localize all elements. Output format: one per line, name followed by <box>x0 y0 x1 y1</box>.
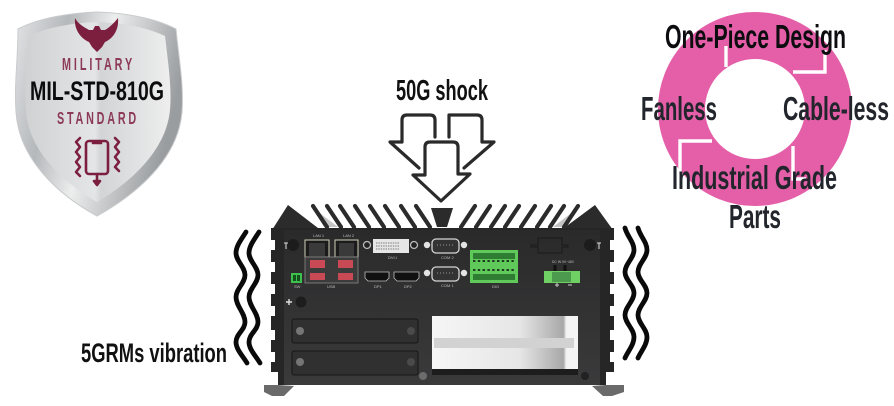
power connector: DC IN 9V~48V <box>552 259 574 264</box>
icon: shock arrows <box>390 115 494 201</box>
shield rim <box>15 12 182 216</box>
LAN ports: LAN 2 <box>343 233 355 238</box>
small green connector <box>291 273 302 289</box>
DVI port: DVI-I <box>388 255 397 260</box>
feature ring diagram <box>641 18 889 235</box>
port tick marks <box>284 243 601 249</box>
power connector <box>544 259 580 287</box>
small green connector: SW <box>294 284 301 289</box>
heatsink fins <box>313 206 578 227</box>
mounting holes <box>287 239 596 251</box>
military standard shield badge <box>15 12 182 216</box>
DVI port <box>364 239 418 260</box>
military label: MILITARY <box>62 55 132 75</box>
LAN ports: LAN 1 <box>313 233 325 238</box>
label: Fanless: Fanless <box>641 90 717 127</box>
ground screw <box>286 296 306 308</box>
green terminal block: DIO <box>492 284 499 289</box>
COM ports <box>424 239 467 288</box>
open expansion bay <box>419 316 589 380</box>
icon: left vibration waves <box>236 232 260 363</box>
standard name: MIL-STD-810G <box>30 76 164 106</box>
expansion slot covers <box>292 319 418 375</box>
USB ports <box>305 257 358 289</box>
fin highlights <box>313 208 578 227</box>
centre heatsink block <box>431 208 453 227</box>
right corner <box>564 205 613 230</box>
blanked port outline <box>531 238 568 253</box>
shield face <box>25 22 171 202</box>
green terminal block <box>470 250 518 289</box>
label: 50G shock: 50G shock <box>396 75 489 107</box>
industrial computer front view <box>264 205 624 396</box>
standard label: STANDARD <box>57 109 136 129</box>
icon: right vibration waves <box>625 228 647 358</box>
mounting flanges <box>264 385 624 396</box>
left corner <box>272 205 318 230</box>
COM ports: COM 1 <box>441 283 454 288</box>
ring dividers <box>680 46 825 179</box>
label: 5GRMs vibration: 5GRMs vibration <box>81 338 227 368</box>
DisplayPort connectors: DP2 <box>404 284 413 289</box>
USB ports: USB <box>327 284 336 289</box>
pink ring <box>682 36 828 182</box>
label: Parts: Parts <box>729 198 781 235</box>
DisplayPort connectors: DP1 <box>374 284 383 289</box>
DisplayPort connectors <box>365 272 419 289</box>
COM ports: COM 2 <box>441 255 454 260</box>
chassis <box>271 228 614 385</box>
icon: vibrating device <box>76 138 119 185</box>
LAN ports <box>305 233 358 257</box>
front panel <box>284 230 600 385</box>
icon: eagle <box>75 18 118 52</box>
